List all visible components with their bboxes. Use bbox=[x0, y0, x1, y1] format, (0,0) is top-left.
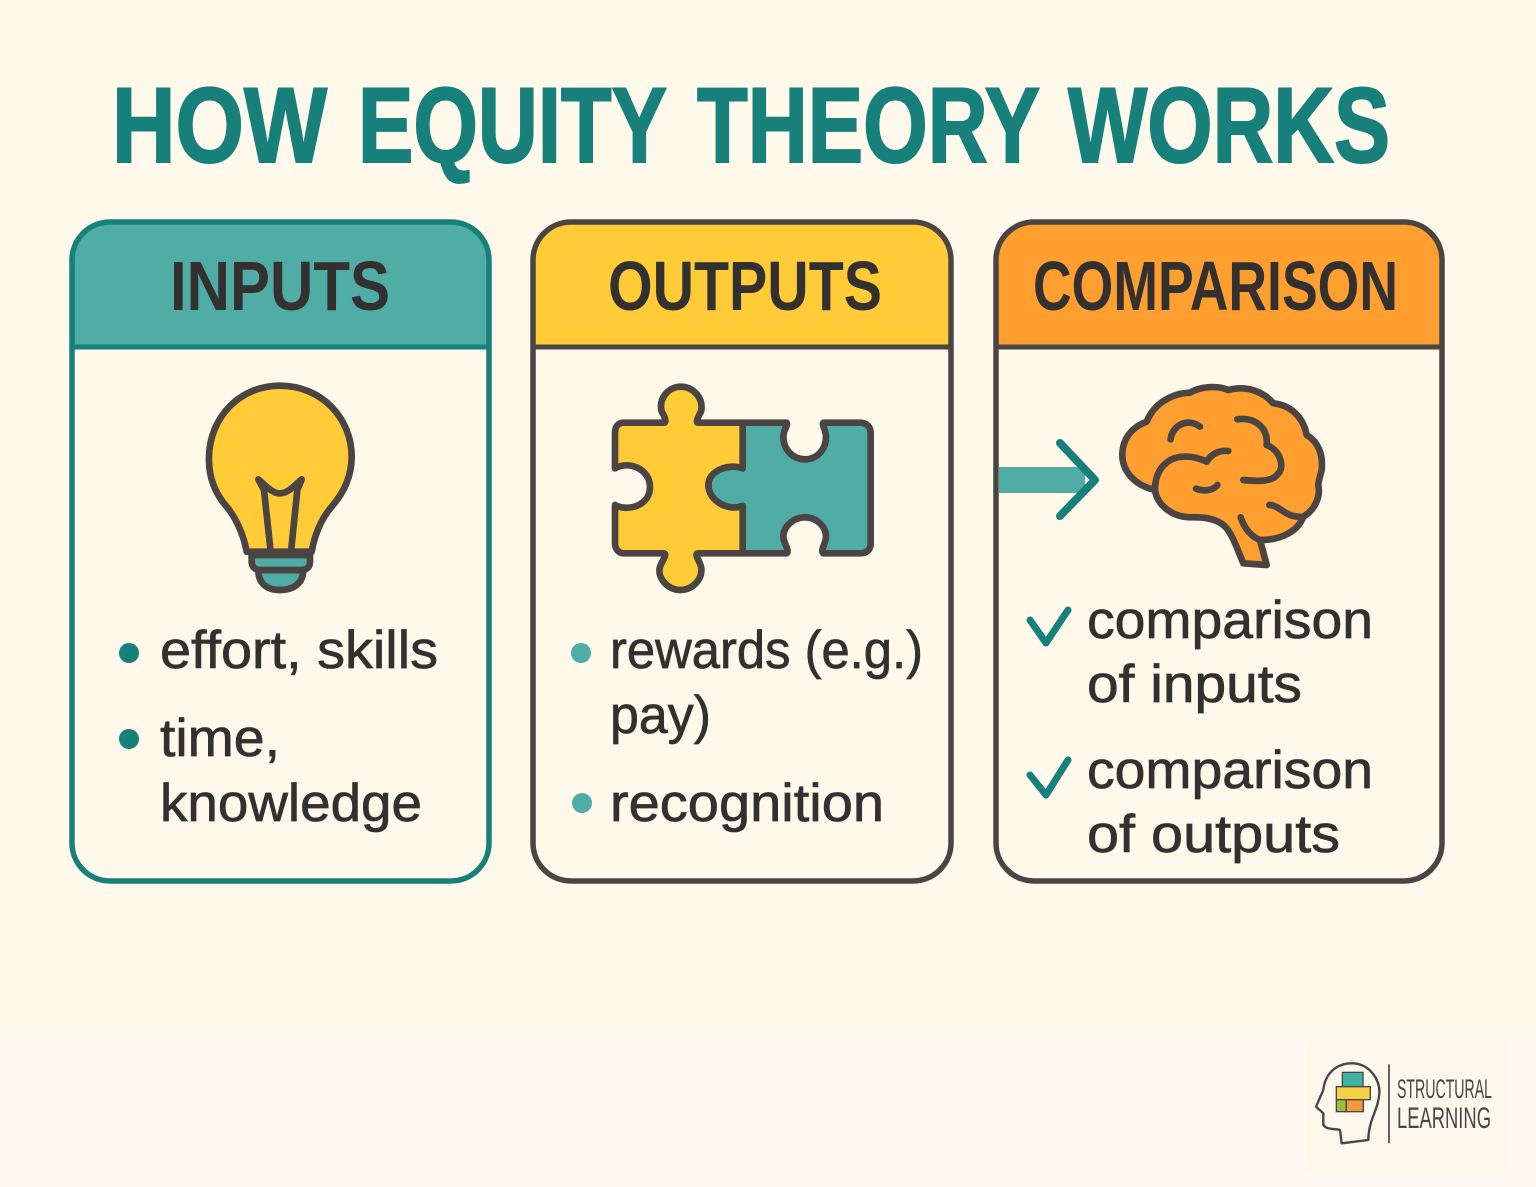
title: HOW bbox=[112, 65, 327, 185]
list: outputs: recognition bbox=[610, 774, 884, 833]
title: WORKS bbox=[1068, 65, 1390, 185]
panel: comparison bbox=[996, 222, 1442, 881]
heading: inputs: INPUTS bbox=[170, 247, 390, 325]
icon: brain bbox=[1122, 387, 1322, 565]
list: inputs: time, bbox=[160, 709, 280, 768]
list: outputs: pay) bbox=[610, 686, 711, 745]
list: comparison: of inputs bbox=[1087, 655, 1302, 714]
icon: light bulb bbox=[209, 386, 352, 590]
list: comparison: comparison bbox=[1087, 741, 1373, 800]
list: comparison: of outputs bbox=[1087, 805, 1340, 864]
icon: puzzle pieces bbox=[615, 387, 871, 590]
arrow bbox=[999, 443, 1095, 516]
list: inputs: effort, skills bbox=[160, 621, 438, 680]
logo: Structural Learning bbox=[1306, 1040, 1506, 1171]
panel: outputs bbox=[533, 222, 951, 881]
list: comparison bbox=[1030, 591, 1373, 864]
list: outputs bbox=[571, 621, 923, 833]
list: outputs: rewards (e.g.) bbox=[610, 621, 923, 680]
list: inputs: knowledge bbox=[160, 774, 422, 833]
title: EQUITY bbox=[358, 65, 667, 185]
list: comparison: comparison bbox=[1087, 591, 1373, 650]
title: THEORY bbox=[697, 65, 1040, 185]
heading: outputs: OUTPUTS bbox=[608, 247, 882, 325]
panel: inputs bbox=[72, 222, 489, 881]
title bbox=[112, 65, 1390, 185]
heading: comparison: COMPARISON bbox=[1033, 247, 1398, 325]
list: inputs bbox=[119, 621, 438, 833]
